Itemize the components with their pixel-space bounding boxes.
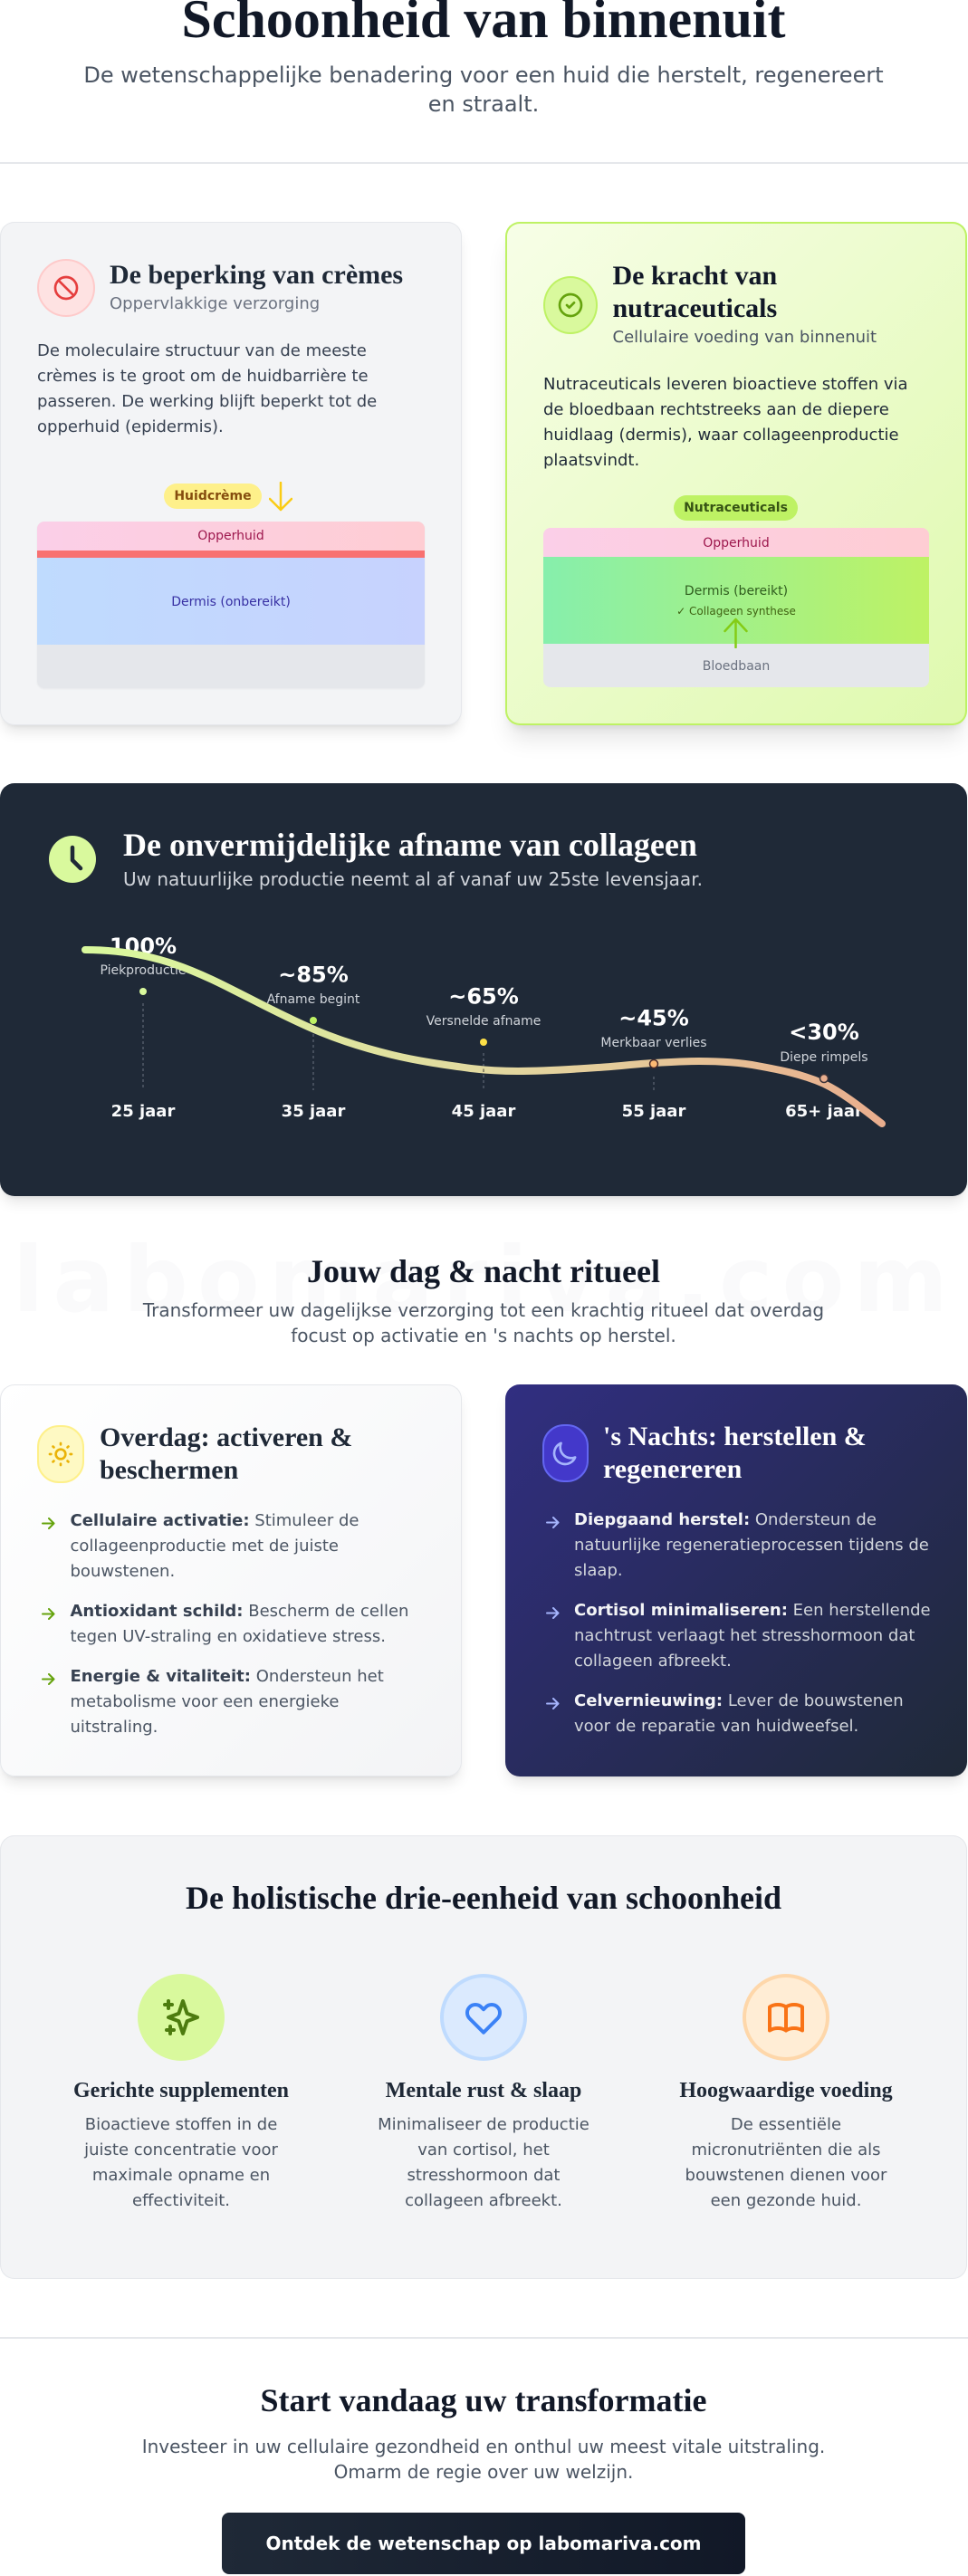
list item: metabolisme voor een energieke [71, 1691, 339, 1711]
card heading [603, 1422, 867, 1484]
arrow: from bloodstream to dermis [724, 618, 748, 648]
pillar text: micronutriënten die als [691, 2140, 881, 2159]
layer: dermis onbereikt [37, 558, 425, 645]
section title: Jouw dag & nacht ritueel [307, 1253, 660, 1289]
card body text: De moleculaire structuur van de meeste [37, 341, 367, 360]
list item: Cortisol minimaliseren: Een herstellende [574, 1601, 931, 1619]
card subheading: Cellulaire voeding van binnenuit [612, 328, 877, 347]
point: 25 jaar [100, 934, 187, 1121]
layer: opperhuid: Opperhuid [197, 529, 264, 543]
card heading: regenereren [603, 1454, 742, 1484]
point: 55 jaar [600, 1005, 707, 1121]
point: 45 jaar: Versnelde afname [426, 1014, 541, 1029]
pillar text: bouwstenen dienen voor [685, 2166, 887, 2185]
icon: ban [37, 259, 95, 317]
list item: Cellulaire activatie: Stimuleer de [71, 1510, 359, 1530]
card heading [612, 261, 777, 323]
list item [546, 1510, 929, 1579]
panel: de beperking van cremes [0, 222, 462, 725]
card heading: De kracht van [612, 261, 777, 291]
pillar text: van cortisol, het [417, 2140, 550, 2159]
badge: huidcreme [164, 484, 262, 509]
point: 45 jaar: 45 jaar [452, 1102, 515, 1121]
subtitle: en straalt. [428, 91, 539, 117]
cta text: Investeer in uw cellulaire gezondheid en onthul uw meest vitale uitstraling. [142, 2436, 825, 2457]
panel heading: De holistische drie-eenheid van schoonheid [186, 1880, 781, 1916]
list item: collageenproductie met de juiste [71, 1536, 339, 1556]
list item: Diepgaand herstel: Ondersteun de [574, 1510, 877, 1528]
point: 35 jaar: Afname begint [267, 992, 360, 1007]
icon: heart [440, 1974, 527, 2061]
list item: uitstraling. [71, 1717, 158, 1737]
list item: Antioxidant schild: Bescherm de cellen [71, 1601, 408, 1621]
card heading: beschermen [100, 1455, 238, 1485]
skin diagram: cream [37, 522, 425, 688]
chart: collageen curve [81, 934, 886, 1127]
section intro [143, 1299, 824, 1346]
pillar text: Minimaliseer de productie [378, 2115, 589, 2134]
list item: bouwstenen. [71, 1561, 175, 1581]
card body text: opperhuid (epidermis). [37, 417, 224, 436]
panel subheading: Uw natuurlijke productie neemt al af vanaf uw 25ste levensjaar. [123, 868, 703, 890]
card body text [543, 375, 908, 470]
layer: bloedbaan: Bloedbaan [703, 659, 770, 674]
layer: dermis bereikt [543, 557, 929, 644]
point: 25 jaar: 25 jaar [111, 1102, 175, 1121]
panel: holistische drie-eenheid [0, 1835, 967, 2279]
pillar text: Bioactieve stoffen in de [85, 2115, 277, 2134]
pillar: voeding [679, 1974, 893, 2210]
card heading [100, 1422, 352, 1485]
point: 55 jaar: 55 jaar [622, 1102, 685, 1121]
badge: nutraceuticals: Nutraceuticals [684, 501, 788, 515]
card heading: 's Nachts: herstellen & [603, 1422, 867, 1451]
list item: slaap. [574, 1561, 623, 1579]
point: 65 jaar [780, 1020, 868, 1121]
layer: dermis onbereikt: Dermis (onbereikt) [171, 595, 291, 609]
markers: data points [139, 988, 828, 1083]
call to action [0, 2337, 968, 2576]
list item [42, 1510, 359, 1581]
pillar text: maximale opname en [92, 2166, 270, 2185]
list item [546, 1691, 904, 1735]
icon: sparkles [138, 1974, 225, 2061]
point: 65 jaar: 65+ jaar [785, 1102, 863, 1121]
card heading: De beperking van crèmes [110, 260, 403, 290]
cta button: Ontdek de wetenschap op labomariva.com [265, 2533, 701, 2554]
panel heading: De onvermijdelijke afname van collageen [123, 827, 697, 863]
panel: overdag [0, 1384, 462, 1776]
icon: moon [542, 1424, 589, 1482]
line: decline curve [85, 950, 882, 1124]
pillar text: collageen afbreekt. [405, 2191, 562, 2210]
pillar title: Mentale rust & slaap [386, 2079, 581, 2102]
section intro: Transformeer uw dagelijkse verzorging tot een krachtig ritueel dat overdag [143, 1299, 824, 1321]
point: 35 jaar: 35 jaar [282, 1102, 345, 1121]
list item: Energie & vitaliteit: Ondersteun het [71, 1666, 384, 1686]
card heading: Overdag: activeren & [100, 1422, 352, 1452]
point: 45 jaar [426, 983, 541, 1121]
subtitle: De wetenschappelijke benadering voor een huid die herstelt, regenereert [83, 62, 884, 88]
card subheading: Oppervlakkige verzorging [110, 294, 320, 313]
cta heading: Start vandaag uw transformatie [261, 2382, 706, 2418]
pillar text: De essentiële [731, 2115, 841, 2134]
arrow: cream stops at surface [269, 482, 292, 511]
pillar text: een gezonde huid. [711, 2191, 861, 2210]
card body text: passeren. De werking blijft beperkt tot de [37, 392, 377, 411]
badge: huidcreme: Huidcrème [174, 489, 252, 503]
pillar text: effectiviteit. [132, 2191, 230, 2210]
pillar title: Gerichte supplementen [73, 2079, 289, 2102]
point: 25 jaar: Piekproductie [100, 963, 187, 978]
card body text: crèmes is te groot om de huidbarrière te [37, 367, 369, 386]
watermark: labomariva.com [13, 1227, 957, 1333]
card body text: de bloedbaan rechtstreeks aan de diepere [543, 400, 889, 419]
header [0, 0, 968, 164]
layer: opperhuid [543, 528, 929, 557]
point: 35 jaar [267, 962, 360, 1121]
list item: collageen afbreekt. [574, 1652, 732, 1670]
list item [42, 1666, 384, 1737]
list item [546, 1601, 931, 1670]
icon: sun [37, 1425, 84, 1483]
subtitle [83, 62, 884, 117]
cta text: Omarm de regie over uw welzijn. [334, 2461, 633, 2483]
point: 65 jaar: <30% [789, 1020, 859, 1045]
panel: collageen afname [0, 783, 967, 1196]
badge: nutraceuticals [674, 495, 798, 521]
list item: tegen UV-straling en oxidatieve stress. [71, 1626, 386, 1646]
label: dermis: Dermis (bereikt) [685, 584, 788, 599]
cta button [222, 2513, 745, 2574]
point: 55 jaar: ~45% [618, 1005, 689, 1030]
pillar text [685, 2115, 887, 2210]
icon: book [743, 1974, 829, 2061]
section heading: ritueel [143, 1253, 824, 1346]
card body text [37, 341, 377, 436]
list item [42, 1601, 408, 1646]
pillar: supplementen [73, 1974, 289, 2210]
pillar text [378, 2115, 589, 2210]
card body text: plaatsvindt. [543, 451, 639, 470]
point: 35 jaar: ~85% [278, 962, 349, 987]
layer: opperhuid: Opperhuid [703, 536, 770, 551]
label: collageen synthese: ✓ Collageen synthese [676, 605, 796, 618]
cta text [142, 2436, 825, 2483]
card body text: Nutraceuticals leveren bioactieve stoffen via [543, 375, 908, 394]
point: 25 jaar: 100% [110, 934, 177, 959]
card body text: huidlaag (dermis), waar collageenproductie [543, 426, 899, 445]
section intro: focust op activatie en 's nachts op herstel. [291, 1325, 676, 1346]
pillar text [83, 2115, 278, 2210]
pillar text: stresshormoon dat [407, 2166, 560, 2185]
list item: Celvernieuwing: Lever de bouwstenen [574, 1691, 904, 1709]
layer: opperhuid [37, 522, 425, 551]
pillar title: Hoogwaardige voeding [679, 2079, 893, 2102]
list item: natuurlijke regeneratieprocessen tijdens de [574, 1536, 929, 1554]
panel: de kracht van nutraceuticals [505, 222, 967, 725]
icon: check circle [543, 276, 598, 334]
point: 55 jaar: Merkbaar verlies [600, 1036, 707, 1050]
icon: clock [49, 836, 96, 883]
pillar: mentale rust [378, 1974, 589, 2210]
pillar text: juiste concentratie voor [84, 2140, 278, 2159]
list item: nachtrust verlaagt het stresshormoon dat [574, 1626, 915, 1644]
point: 45 jaar: ~65% [448, 983, 519, 1009]
point: 65 jaar: Diepe rimpels [780, 1050, 868, 1065]
panel: 's nachts [505, 1384, 967, 1776]
skin diagram: nutraceuticals [543, 528, 929, 687]
card heading: nutraceuticals [612, 293, 777, 323]
list item: voor de reparatie van huidweefsel. [574, 1717, 858, 1735]
